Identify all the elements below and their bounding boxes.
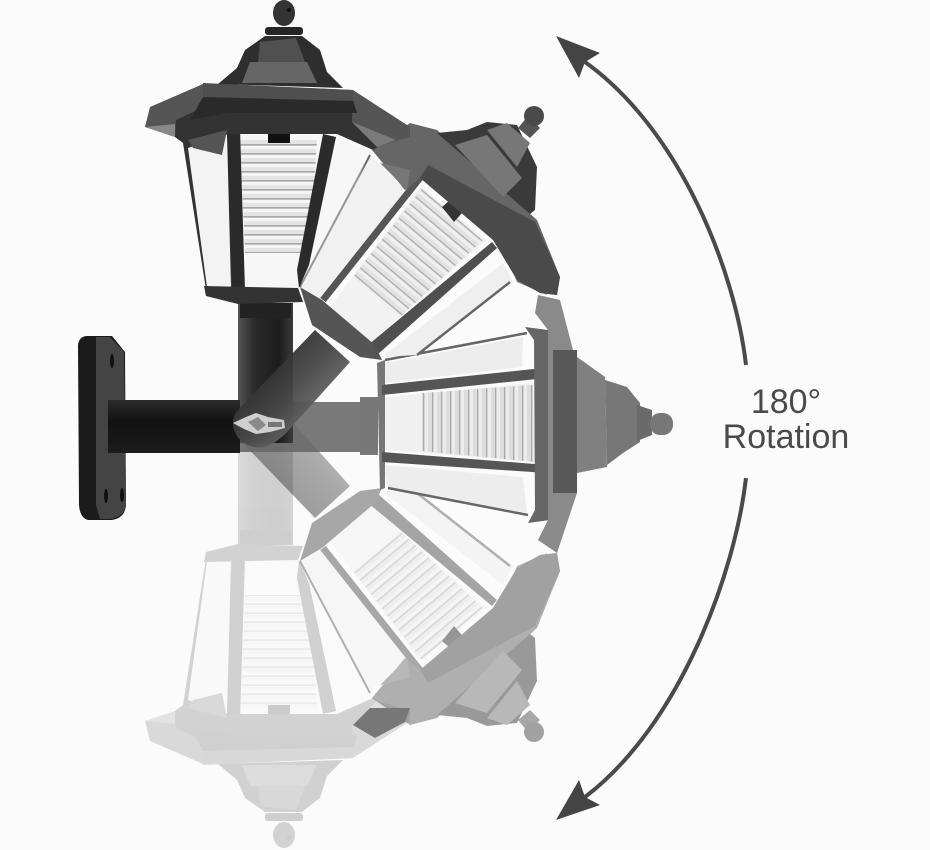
90 degree stem <box>238 397 378 455</box>
rotation label: Rotation <box>723 418 849 456</box>
upright lantern stem <box>238 303 293 443</box>
lantern at 45 degrees <box>233 106 560 447</box>
wall bracket <box>78 336 240 520</box>
upper rotation arrow <box>556 36 746 365</box>
90 degree roof <box>535 295 673 553</box>
90 degree glass panels <box>385 337 535 513</box>
lantern at 135 degrees <box>233 401 560 742</box>
lantern at 180 degrees, faded reflection <box>145 405 410 848</box>
90 degree frame <box>377 327 550 523</box>
dark eave corner of the reflected lantern <box>353 708 410 738</box>
lantern at 90 degrees <box>238 295 673 553</box>
upright lantern head <box>145 0 410 304</box>
rotation label <box>723 383 849 456</box>
rotation label: 180° <box>751 383 821 421</box>
lower rotation arrow <box>556 478 746 820</box>
pivot bolt <box>233 413 285 434</box>
